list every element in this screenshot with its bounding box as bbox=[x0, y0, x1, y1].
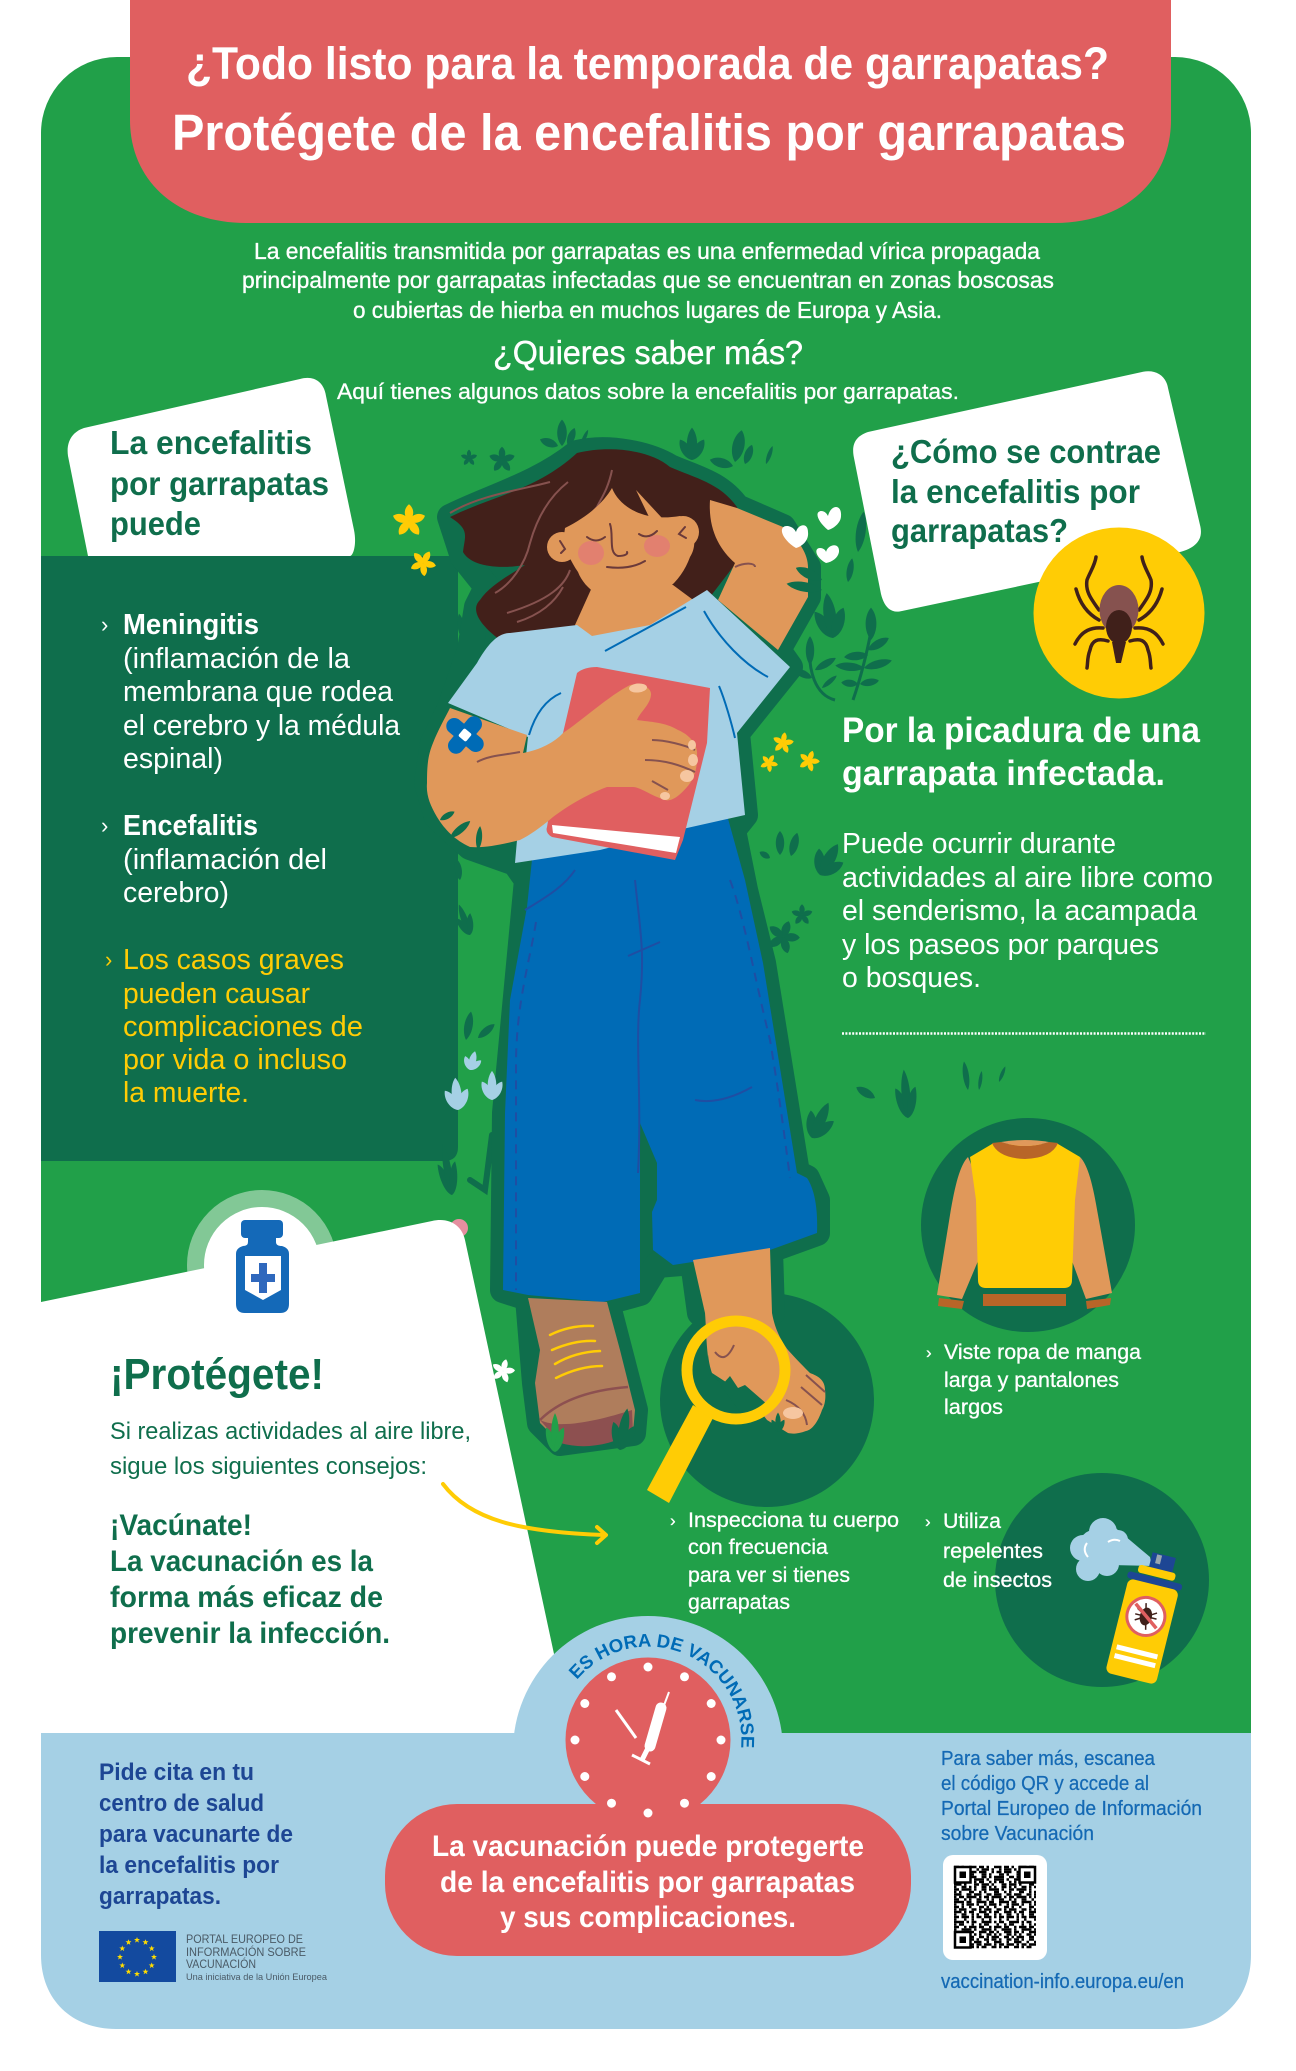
panel: blue footer bbox=[41, 1733, 1251, 2029]
intro text bbox=[242, 238, 1054, 323]
logo text: INFORMACIÓN SOBRE bbox=[186, 1944, 306, 1959]
tip: repellent: Utiliza bbox=[943, 1510, 1001, 1533]
pill: vaccination message: de la encefalitis por garrapatas bbox=[440, 1866, 855, 1899]
tag: la encefalitis puede: puede bbox=[110, 505, 201, 542]
intro text: o cubiertas de hierba en muchos lugares de Europa y Asia. bbox=[353, 297, 942, 323]
list item: encefalitis: › bbox=[101, 813, 108, 838]
text: vaccination bbox=[110, 1509, 390, 1650]
yellow flowers left bbox=[392, 504, 441, 581]
arc label: ES HORA DE VACUNARSE bbox=[568, 1634, 754, 1748]
text: outdoor activities: Puede ocurrir durante bbox=[842, 828, 1116, 860]
list item: meningitis: › bbox=[101, 612, 108, 637]
text: scan QR: Portal Europeo de Información bbox=[941, 1798, 1202, 1820]
text: scan QR: el código QR y accede al bbox=[941, 1773, 1149, 1795]
yellow flowers right bbox=[757, 730, 823, 775]
tip: inspect bbox=[670, 1509, 899, 1614]
raised arm bbox=[710, 500, 808, 650]
text: vaccination: La vacunación es la bbox=[110, 1545, 373, 1578]
pill: vaccination message: y sus complicaciones. bbox=[500, 1901, 796, 1934]
face bbox=[547, 488, 699, 603]
pill: vaccination message: La vacunación puede protegerte bbox=[432, 1830, 864, 1863]
list item: meningitis: espinal) bbox=[123, 743, 223, 775]
text: advice intro: sigue los siguientes consejos: bbox=[110, 1453, 427, 1480]
hair strands bbox=[450, 470, 612, 622]
elbow grass bbox=[438, 809, 483, 850]
title line 2: Protégete de la encefalitis por garrapatas bbox=[172, 104, 1126, 161]
title line 1: ¿Todo listo para la temporada de garrapatas? bbox=[186, 38, 1109, 89]
tip: inspect: garrapatas bbox=[688, 1591, 790, 1614]
panel: protect yourself bbox=[41, 1220, 571, 1733]
icon: tick in yellow circle bbox=[1034, 528, 1204, 698]
text: advice intro bbox=[110, 1418, 471, 1480]
text: advice intro: Si realizas actividades al aire libre, bbox=[110, 1418, 471, 1445]
tip: clothing bbox=[926, 1341, 1141, 1419]
hair bbox=[450, 449, 743, 640]
shirt folds bbox=[529, 607, 768, 738]
text: outdoor activities: actividades al aire libre como bbox=[842, 862, 1213, 894]
white hearts bbox=[782, 507, 841, 563]
tip: clothing: largos bbox=[944, 1396, 1003, 1419]
tip: inspect: Inspecciona tu cuerpo bbox=[688, 1509, 899, 1532]
neck bbox=[575, 585, 700, 650]
tag: como se contrae: ¿Cómo se contrae bbox=[891, 433, 1161, 470]
list item: casos graves: por vida o incluso bbox=[123, 1044, 347, 1076]
logo text: VACUNACIÓN bbox=[186, 1956, 256, 1971]
subheading: quieres saber mas: ¿Quieres saber más? bbox=[493, 334, 803, 371]
vial bbox=[236, 1220, 289, 1313]
tip: clothing: › bbox=[926, 1343, 932, 1362]
heading: por la picadura bbox=[842, 711, 1200, 793]
tip: repellent: › bbox=[925, 1512, 931, 1531]
tip: inspect: › bbox=[670, 1511, 676, 1530]
circle: inspect body background bbox=[660, 1293, 874, 1507]
list item: meningitis: Meningitis bbox=[123, 609, 259, 641]
tag: como se contrae: garrapatas? bbox=[891, 512, 1068, 549]
panel: green background bbox=[41, 57, 1251, 1817]
list item: casos graves: complicaciones de bbox=[123, 1011, 363, 1043]
text: scan QR: Para saber más, escanea bbox=[941, 1748, 1156, 1770]
icon: bandage bbox=[434, 704, 496, 766]
clock dots and syringe bbox=[570, 1662, 726, 1818]
text: ask appointment: Pide cita en tu bbox=[99, 1759, 254, 1786]
URL: vaccination-info.europa.eu/en bbox=[941, 1971, 1184, 1993]
figure outline bbox=[427, 450, 817, 1443]
tip: inspect: con frecuencia bbox=[688, 1536, 828, 1559]
white flower bbox=[488, 1356, 518, 1385]
text: ask appointment: la encefalitis por bbox=[99, 1852, 279, 1879]
text: ask appointment: centro de salud bbox=[99, 1790, 264, 1817]
text: ask appointment bbox=[99, 1759, 293, 1910]
tip: repellent: de insectos bbox=[943, 1569, 1052, 1592]
list item: meningitis: membrana que rodea bbox=[123, 676, 394, 708]
right leg and foot bbox=[693, 1248, 825, 1434]
plants on top of arm and flowers bbox=[392, 504, 841, 1114]
book bbox=[547, 667, 710, 860]
list item: casos graves: Los casos graves bbox=[123, 944, 344, 976]
plants behind figure bbox=[431, 420, 1007, 1201]
list item: casos graves: › bbox=[105, 947, 112, 972]
arrow bbox=[443, 1484, 606, 1543]
header banner bbox=[130, 0, 1171, 223]
pink petal bbox=[450, 1219, 468, 1237]
QR code bbox=[943, 1855, 1047, 1960]
leaves on arm bbox=[786, 563, 824, 595]
pill: vaccination message bbox=[385, 1804, 911, 1956]
tip: repellent: repelentes bbox=[943, 1540, 1043, 1563]
panel: effects list bbox=[41, 556, 458, 1161]
clock badge bbox=[514, 1616, 782, 1804]
list item: encefalitis: Encefalitis bbox=[123, 810, 258, 842]
tag: como se contrae bbox=[853, 371, 1201, 612]
list item: encefalitis: (inflamación del bbox=[123, 844, 327, 876]
list item: encefalitis: cerebro) bbox=[123, 877, 229, 909]
tag: la encefalitis puede: La encefalitis bbox=[110, 424, 312, 461]
tag: la encefalitis puede bbox=[68, 378, 355, 556]
tip: inspect: para ver si tienes bbox=[688, 1564, 850, 1587]
text: scan QR bbox=[941, 1748, 1202, 1845]
logo text: PORTAL EUROPEO DE bbox=[186, 1932, 303, 1946]
logo text bbox=[186, 1932, 328, 1983]
list item: encefalitis bbox=[101, 810, 327, 909]
text: vaccination: ¡Vacúnate! bbox=[110, 1509, 252, 1542]
text: outdoor activities: o bosques. bbox=[842, 962, 981, 994]
list item: casos graves: pueden causar bbox=[123, 978, 310, 1010]
intro text: principalmente por garrapatas infectadas que se encuentran en zonas boscosas bbox=[242, 267, 1054, 293]
text: outdoor activities: el senderismo, la acampada bbox=[842, 895, 1198, 927]
text: scan QR: sobre Vacunación bbox=[941, 1823, 1094, 1845]
text: outdoor activities: y los paseos por parques bbox=[842, 929, 1159, 961]
text: ask appointment: para vacunarte de bbox=[99, 1821, 293, 1848]
tag: como se contrae: la encefalitis por bbox=[891, 473, 1140, 510]
icon: sweater bbox=[921, 1118, 1135, 1332]
list item: casos graves: la muerte. bbox=[123, 1077, 249, 1109]
tag: la encefalitis puede: por garrapatas bbox=[110, 465, 329, 502]
shirt bbox=[448, 590, 790, 863]
light blue flowers bbox=[440, 1048, 505, 1114]
text: vaccination: forma más eficaz de bbox=[110, 1581, 383, 1614]
list item: casos graves bbox=[105, 944, 363, 1109]
heading: protegete: ¡Protégete! bbox=[110, 1350, 324, 1399]
intro text: La encefalitis transmitida por garrapatas es una enfermedad vírica propagada bbox=[254, 238, 1040, 264]
arm and hand bbox=[427, 683, 698, 847]
list item: meningitis: el cerebro y la médula bbox=[123, 710, 401, 742]
left foot bbox=[528, 1298, 642, 1456]
tip: clothing: Viste ropa de manga bbox=[944, 1341, 1141, 1364]
text: vaccination: prevenir la infección. bbox=[110, 1617, 390, 1650]
heading: por la picadura: garrapata infectada. bbox=[842, 754, 1165, 793]
heading: por la picadura: Por la picadura de una bbox=[842, 711, 1200, 750]
icon: vial with halo bbox=[196, 1198, 328, 1332]
jeans bbox=[503, 815, 817, 1302]
figure: woman lying on grass bbox=[427, 449, 825, 1456]
list item: meningitis: (inflamación de la bbox=[123, 643, 351, 675]
list item: meningitis bbox=[101, 609, 401, 775]
logo text: Una iniciativa de la Unión Europea bbox=[186, 1972, 328, 1983]
text: outdoor activities bbox=[842, 828, 1213, 994]
tip: clothing: larga y pantalones bbox=[944, 1369, 1119, 1392]
icon: repellent spray bbox=[995, 1473, 1209, 1687]
icon: magnifying glass bbox=[647, 1321, 785, 1503]
logo: EU flag bbox=[99, 1931, 176, 1982]
tip: repellent bbox=[925, 1510, 1052, 1592]
text: ask appointment: garrapatas. bbox=[99, 1883, 221, 1910]
sub text: Aquí tienes algunos datos sobre la encefalitis por garrapatas. bbox=[337, 379, 959, 404]
